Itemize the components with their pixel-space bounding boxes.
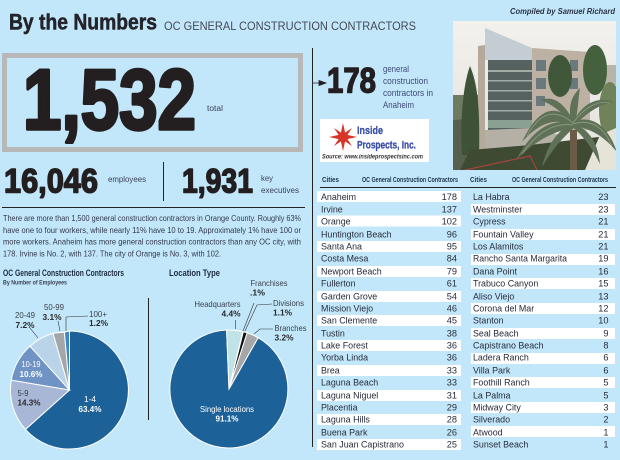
stat: Anaheim bbox=[327, 62, 433, 110]
label: 1-4: 63.4% bbox=[78, 404, 102, 414]
table: cities column 1: 178 bbox=[442, 192, 457, 202]
table: cities column 2: 19 bbox=[598, 254, 608, 264]
summary text: have one to four workers, while nearly 11% have 10 to 19. Approximately 1% have 100 or bbox=[3, 225, 301, 235]
stat: Anaheim: construction bbox=[383, 76, 428, 86]
table: cities column 2: 21 bbox=[598, 242, 608, 252]
table: cities column 1: Huntington Beach bbox=[321, 230, 392, 240]
label: headquarters: 4.4% bbox=[222, 310, 241, 318]
label: 1-4: 1-4 bbox=[84, 394, 96, 404]
table: cities column 1: Placentia bbox=[321, 402, 358, 412]
label: 10-19 bbox=[20, 359, 43, 379]
table: cities column 1: Tustin bbox=[321, 328, 345, 338]
photo: office building bbox=[453, 21, 620, 170]
label: branches: 3.2% bbox=[274, 334, 294, 342]
table: cities column 2: 21 bbox=[598, 230, 608, 240]
table: cities column 1 bbox=[317, 191, 461, 450]
table: cities column 2: Stanton bbox=[473, 316, 504, 326]
label: 50-99: 3.1% bbox=[42, 313, 62, 322]
icon: compass star bbox=[329, 123, 357, 151]
table: cities column 2: Dana Point bbox=[473, 266, 517, 276]
stat: key executives: 1,931 bbox=[182, 162, 253, 200]
table: cities column 1: 33 bbox=[447, 378, 457, 388]
table: cities column 2: 15 bbox=[598, 278, 608, 288]
table: cities column 1: Laguna Hills bbox=[321, 414, 370, 424]
table: cities column 1: 61 bbox=[447, 278, 457, 288]
table: cities column 1: 84 bbox=[447, 254, 457, 264]
stat: Anaheim: 178 bbox=[327, 62, 376, 100]
big number: 1,532: 1,532 bbox=[23, 53, 196, 148]
table: cities column 1: 36 bbox=[447, 340, 457, 350]
summary text: There are more than 1,500 general construction contractors in Orange County. Roughly 63% bbox=[3, 213, 301, 223]
table: cities column 1: 54 bbox=[447, 292, 457, 302]
title: By the Numbers bbox=[9, 10, 157, 34]
table header: OC General Construction Contractors bbox=[362, 175, 458, 184]
table: cities column 1: Laguna Niguel bbox=[321, 390, 378, 400]
stat: employees: 16,046 bbox=[4, 162, 98, 200]
label: headquarters bbox=[194, 299, 241, 318]
table: cities column 1: 26 bbox=[447, 428, 457, 438]
table: cities column 1: Brea bbox=[321, 366, 340, 376]
label: 100+ bbox=[89, 309, 109, 328]
table: cities column 2: 6 bbox=[603, 366, 608, 376]
table: cities column 1: 79 bbox=[447, 266, 457, 276]
table: cities column 1: Yorba Linda bbox=[321, 352, 368, 362]
label: branches bbox=[274, 323, 306, 342]
table: cities column 1: Mission Viejo bbox=[321, 304, 373, 314]
label: 5-9: 14.3% bbox=[18, 398, 41, 408]
table: cities column 2: Villa Park bbox=[473, 366, 511, 376]
summary text: 178. Irvine is No. 2, with 137. The city of Orange is No. 3, with 102. bbox=[3, 248, 221, 258]
table: cities column 2: 12 bbox=[598, 304, 608, 314]
table: cities column 2: 6 bbox=[603, 352, 608, 362]
table: cities column 1: 33 bbox=[447, 366, 457, 376]
table: cities column 2: 9 bbox=[603, 328, 608, 338]
label: franchises: Franchises bbox=[250, 278, 288, 288]
table: cities column 2: Fountain Valley bbox=[473, 230, 534, 240]
table: cities column 1: Laguna Beach bbox=[321, 378, 378, 388]
table: cities column 1: San Juan Capistrano bbox=[321, 440, 404, 450]
table: cities column 2: Seal Beach bbox=[473, 328, 518, 338]
stat: key executives: executives bbox=[261, 185, 299, 195]
table: cities column 1: 38 bbox=[447, 328, 457, 338]
chart heading: employees: OC General Construction Contractors bbox=[3, 268, 124, 278]
chart heading: location type: Location Type bbox=[169, 268, 220, 279]
label: divisions bbox=[273, 298, 304, 318]
table: cities column 1: 28 bbox=[447, 414, 457, 424]
label: 100+: 100+ bbox=[89, 309, 107, 319]
table: cities column 1: Santa Ana bbox=[321, 242, 362, 252]
pie chart: employees bbox=[10, 302, 128, 449]
table: cities column 1: 45 bbox=[447, 316, 457, 326]
table: cities column 2: 8 bbox=[603, 340, 608, 350]
table header bbox=[320, 175, 616, 188]
table: cities column 1: Irvine bbox=[321, 204, 343, 214]
label: 5-9: 5-9 bbox=[18, 388, 29, 398]
table: cities column 2: La Palma bbox=[473, 390, 511, 400]
table: cities column 2: 2 bbox=[603, 414, 608, 424]
table: cities column 2 bbox=[471, 192, 615, 450]
label: franchises: .1% bbox=[250, 288, 266, 298]
stat: Anaheim: general bbox=[383, 64, 409, 74]
table header: Cities bbox=[470, 175, 487, 184]
table: cities column 2: Ladera Ranch bbox=[473, 352, 529, 362]
table: cities column 2: 13 bbox=[598, 292, 608, 302]
table: cities column 1: 102 bbox=[442, 216, 457, 226]
summary text bbox=[3, 213, 301, 258]
table: cities column 2: Corona del Mar bbox=[473, 304, 534, 314]
logo: Inside Prospects: Source: www.insideprospectsinc.com bbox=[322, 154, 423, 160]
label: 20-49: 7.2% bbox=[16, 321, 35, 330]
table: cities column 1: Orange bbox=[321, 216, 351, 226]
logo: Inside Prospects bbox=[320, 119, 429, 162]
table: cities column 2: 1 bbox=[603, 440, 608, 450]
label: 100+: 1.2% bbox=[89, 319, 109, 328]
table: cities column 2: 23 bbox=[598, 204, 608, 214]
table: cities column 2: 1 bbox=[603, 428, 608, 438]
table: cities column 2: Sunset Beach bbox=[473, 440, 528, 450]
label: branches: Branches bbox=[274, 323, 306, 333]
label: divisions: 1.1% bbox=[273, 308, 293, 318]
table: cities column 1: Anaheim bbox=[321, 192, 356, 202]
table: cities column 2: Cypress bbox=[473, 216, 506, 226]
table: cities column 1: 95 bbox=[447, 242, 457, 252]
label: 5-9 bbox=[18, 388, 41, 408]
logo: Inside Prospects: Inside bbox=[357, 125, 383, 137]
stat: employees: employees bbox=[108, 174, 146, 184]
table: cities column 2: 21 bbox=[598, 216, 608, 226]
label: divisions: Divisions bbox=[273, 298, 304, 308]
table: cities column 2: Silverado bbox=[473, 414, 510, 424]
stat: Anaheim: Anaheim bbox=[383, 100, 414, 110]
label: 10-19: 10-19 bbox=[22, 359, 41, 369]
panel: total contractors bbox=[4, 53, 300, 150]
table: cities column 2: 16 bbox=[598, 266, 608, 276]
table: cities column 1: 31 bbox=[447, 390, 457, 400]
table: cities column 2: Atwood bbox=[473, 428, 503, 438]
table: cities column 1: Lake Forest bbox=[321, 340, 368, 350]
table: cities column 2: La Habra bbox=[473, 192, 510, 202]
label: single locations bbox=[200, 404, 254, 424]
summary text: more workers. Anaheim has more general construction contractors than any OC city, with bbox=[3, 236, 301, 246]
stat: Anaheim: contractors in bbox=[383, 88, 433, 98]
table: cities column 2: 5 bbox=[603, 378, 608, 388]
label: 50-99 bbox=[42, 302, 64, 322]
table: cities column 1: 29 bbox=[447, 402, 457, 412]
label: franchises bbox=[250, 278, 288, 298]
label: 1-4 bbox=[78, 394, 102, 414]
label: single locations: Single locations bbox=[200, 404, 254, 414]
table: cities column 2: 5 bbox=[603, 390, 608, 400]
table: cities column 2: Foothill Ranch bbox=[473, 378, 530, 388]
table: cities column 2: Trabuco Canyon bbox=[473, 278, 538, 288]
chart heading: employees: By Number of Employees bbox=[3, 280, 68, 286]
arrow bbox=[312, 80, 326, 86]
table: cities column 1: Newport Beach bbox=[321, 266, 382, 276]
label: 10-19: 10.6% bbox=[20, 369, 43, 379]
table: cities column 2: 3 bbox=[603, 402, 608, 412]
table: cities column 2: Aliso Viejo bbox=[473, 292, 514, 302]
table: cities column 1: Buena Park bbox=[321, 428, 368, 438]
label: 20-49: 20-49 bbox=[15, 310, 35, 320]
table: cities column 2: Westminster bbox=[473, 204, 522, 214]
table: cities column 1: 25 bbox=[447, 440, 457, 450]
label: headquarters: Headquarters bbox=[194, 299, 240, 309]
table: cities column 2: 10 bbox=[598, 316, 608, 326]
label: 20-49 bbox=[15, 310, 35, 330]
pie chart: location type bbox=[170, 278, 306, 448]
table: cities column 2: Los Alamitos bbox=[473, 242, 524, 252]
table: cities column 1: 96 bbox=[447, 230, 457, 240]
table: cities column 2: Rancho Santa Margarita bbox=[473, 254, 567, 264]
table: cities column 1: Fullerton bbox=[321, 278, 356, 288]
label: single locations: 91.1% bbox=[216, 414, 239, 424]
table: cities column 1: 137 bbox=[442, 204, 457, 214]
table: cities column 2: 23 bbox=[598, 192, 608, 202]
table header: Cities bbox=[322, 175, 339, 184]
logo: Inside Prospects: Prospects, Inc. bbox=[357, 140, 416, 152]
table: cities column 1: 36 bbox=[447, 352, 457, 362]
table: cities column 1: San Clemente bbox=[321, 316, 377, 326]
table: cities column 1: Garden Grove bbox=[321, 292, 377, 302]
subtitle: OC GENERAL CONSTRUCTION CONTRACTORS bbox=[164, 19, 416, 33]
stat: key executives: key bbox=[261, 173, 274, 183]
table: cities column 1: 46 bbox=[447, 304, 457, 314]
table: cities column 1: Costa Mesa bbox=[321, 254, 368, 264]
label: 50-99: 50-99 bbox=[44, 302, 64, 312]
table: cities column 2: Midway City bbox=[473, 402, 521, 412]
chart heading: employees bbox=[3, 268, 124, 286]
label: total: total bbox=[207, 104, 223, 113]
table: cities column 2: Capistrano Beach bbox=[473, 340, 544, 350]
